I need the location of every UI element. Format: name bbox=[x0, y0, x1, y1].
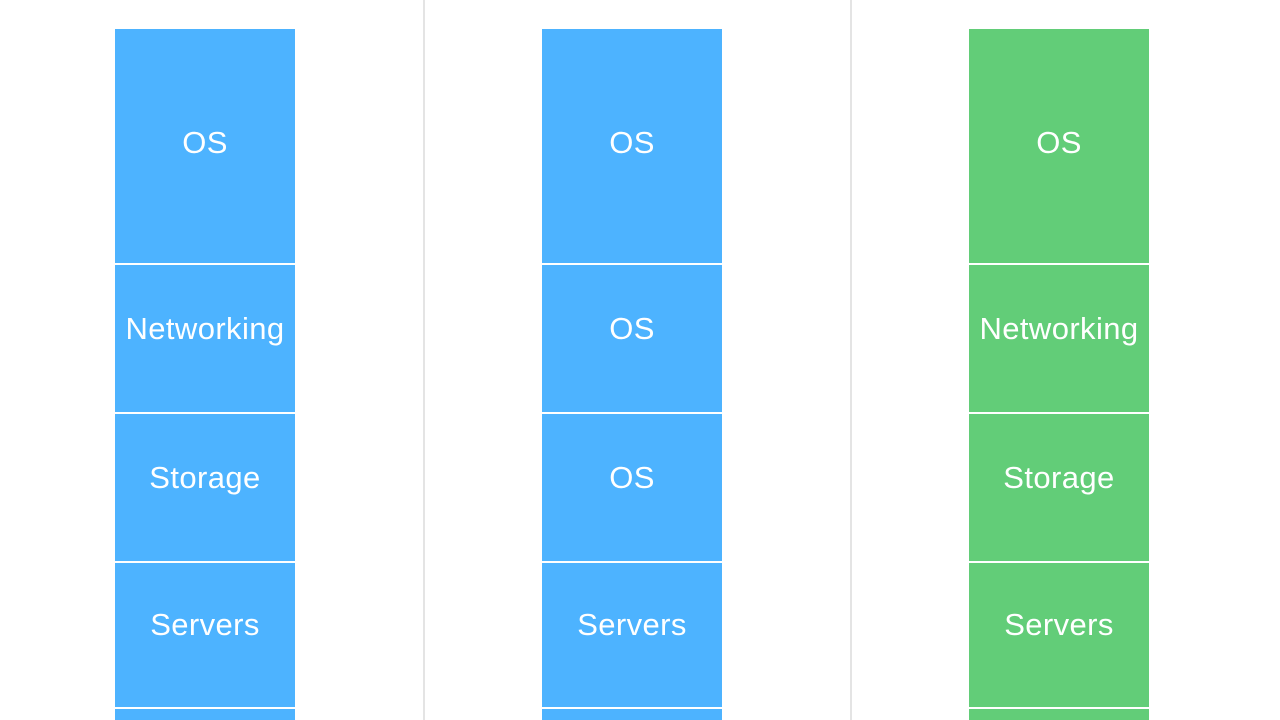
block: Servers bbox=[969, 563, 1149, 707]
block: Storage: Storage bbox=[149, 460, 261, 494]
block: Storage: Storage bbox=[1003, 460, 1115, 494]
block: bottom partial bbox=[542, 709, 722, 720]
block: Servers: Servers bbox=[150, 607, 260, 642]
block: OS bbox=[115, 29, 295, 263]
block: OS: OS bbox=[182, 125, 228, 160]
block: OS: OS bbox=[1036, 125, 1082, 160]
block: Servers bbox=[115, 563, 295, 707]
column 1: blue stack bbox=[115, 29, 295, 720]
column 2: blue stack bbox=[542, 29, 722, 720]
block: Storage bbox=[115, 414, 295, 561]
block: OS second: OS bbox=[609, 310, 655, 346]
block: OS bbox=[969, 29, 1149, 263]
block: Servers: Servers bbox=[1004, 607, 1114, 642]
block: OS: OS bbox=[609, 125, 655, 160]
block: Servers bbox=[542, 563, 722, 707]
block: Networking bbox=[115, 265, 295, 412]
block: Storage bbox=[969, 414, 1149, 561]
block: OS second bbox=[542, 265, 722, 412]
block: Servers: Servers bbox=[577, 607, 687, 642]
block: bottom partial bbox=[969, 709, 1149, 720]
block: Networking: Networking bbox=[979, 310, 1139, 346]
block: Networking: Networking bbox=[125, 310, 285, 346]
column 3: green stack bbox=[969, 29, 1149, 720]
block: OS third bbox=[542, 414, 722, 561]
block: bottom partial bbox=[115, 709, 295, 720]
block: OS bbox=[542, 29, 722, 263]
block: Networking bbox=[969, 265, 1149, 412]
block: OS third: OS bbox=[609, 460, 655, 494]
